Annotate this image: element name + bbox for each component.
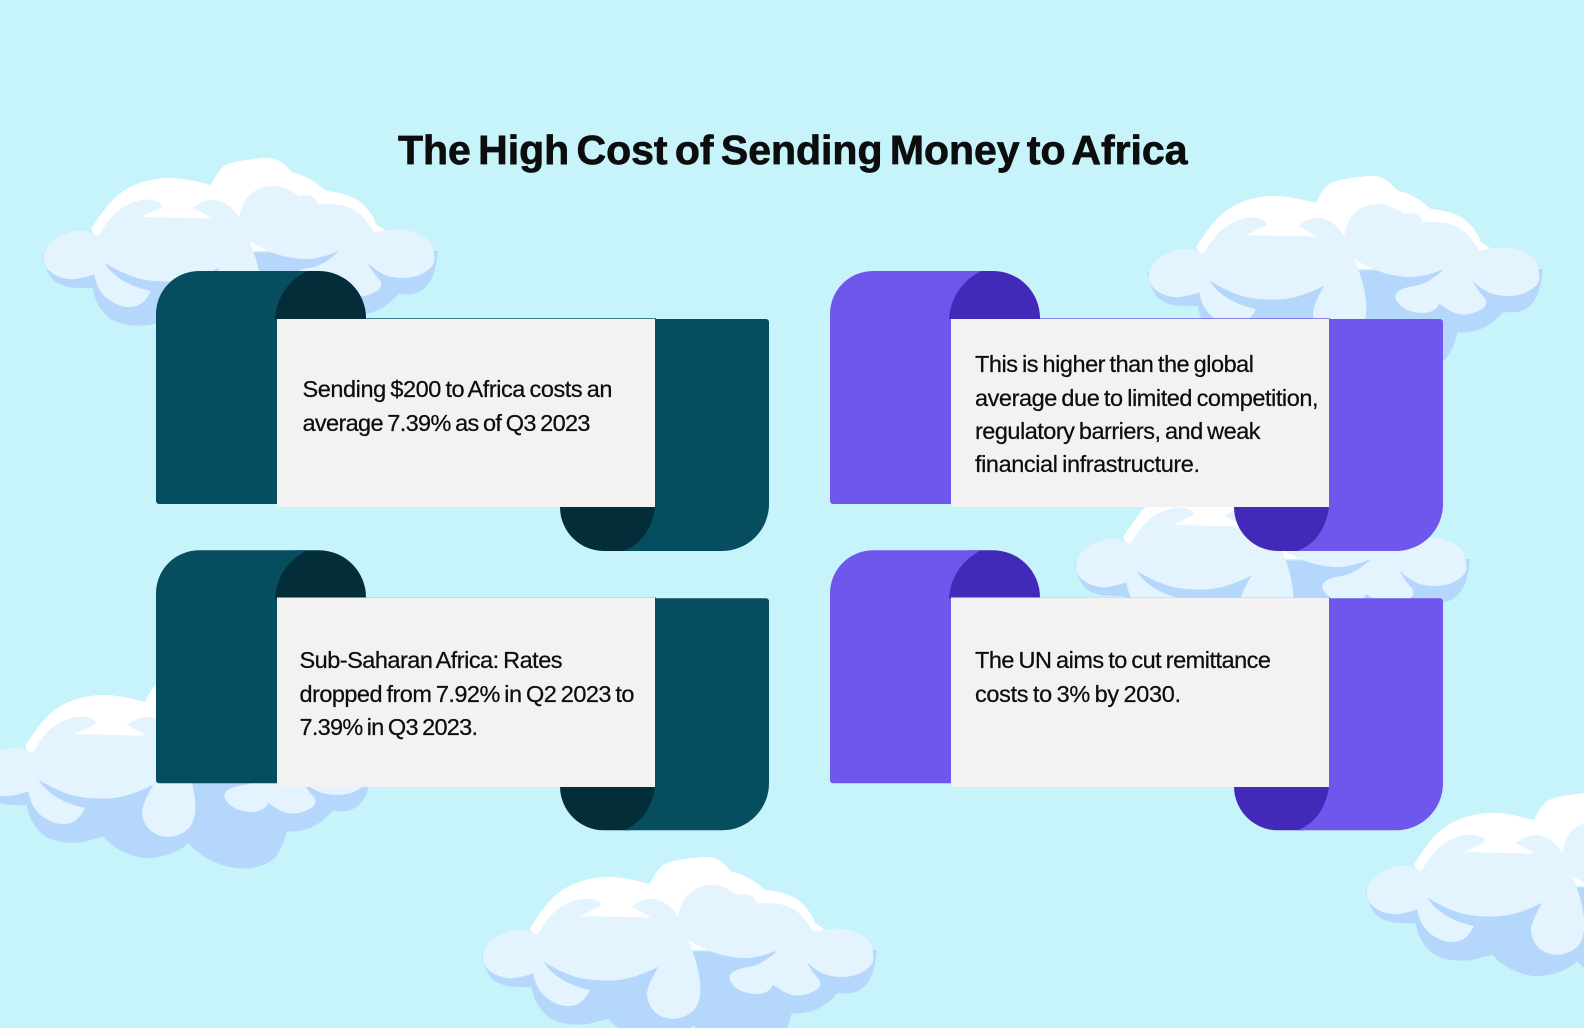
card text: dropped from 7.92% in Q2 2023 to	[300, 681, 634, 707]
card text: Sending $200 to Africa costs an	[302, 376, 612, 402]
title: The High Cost of Sending Money to Africa	[398, 127, 1189, 173]
card text: regulatory barriers, and weak	[975, 418, 1261, 444]
text card	[951, 598, 1329, 787]
card text: Sub-Saharan Africa: Rates	[300, 647, 562, 673]
teal scroll ribbon	[156, 550, 769, 830]
cloud: middle right	[1075, 466, 1470, 659]
cloud: bottom right	[1366, 793, 1584, 986]
panel: sending cost	[156, 271, 769, 551]
card text: financial infrastructure.	[975, 451, 1200, 477]
teal scroll ribbon	[156, 271, 769, 551]
panel: why higher than global average	[830, 271, 1443, 551]
panel: sub-saharan rates	[156, 550, 769, 830]
panel: UN target	[830, 550, 1443, 830]
purple scroll ribbon	[830, 271, 1443, 551]
cloud: middle left	[0, 675, 372, 868]
cloud: top left	[43, 158, 438, 351]
text card	[277, 319, 655, 507]
card text	[300, 647, 634, 740]
card text: costs to 3% by 2030.	[975, 681, 1181, 707]
purple scroll ribbon	[830, 550, 1443, 830]
card text	[975, 351, 1318, 477]
card text: 7.39% in Q3 2023.	[300, 714, 478, 740]
card text	[975, 647, 1271, 707]
card text: The UN aims to cut remittance	[975, 647, 1271, 673]
card text: average 7.39% as of Q3 2023	[302, 410, 590, 436]
text card	[951, 319, 1329, 507]
card text	[302, 376, 612, 436]
card text: This is higher than the global	[975, 351, 1254, 377]
card text: average due to limited competition,	[975, 385, 1318, 411]
cloud: bottom centre	[482, 857, 877, 1028]
cloud: top right	[1148, 176, 1543, 369]
text card	[277, 598, 655, 787]
